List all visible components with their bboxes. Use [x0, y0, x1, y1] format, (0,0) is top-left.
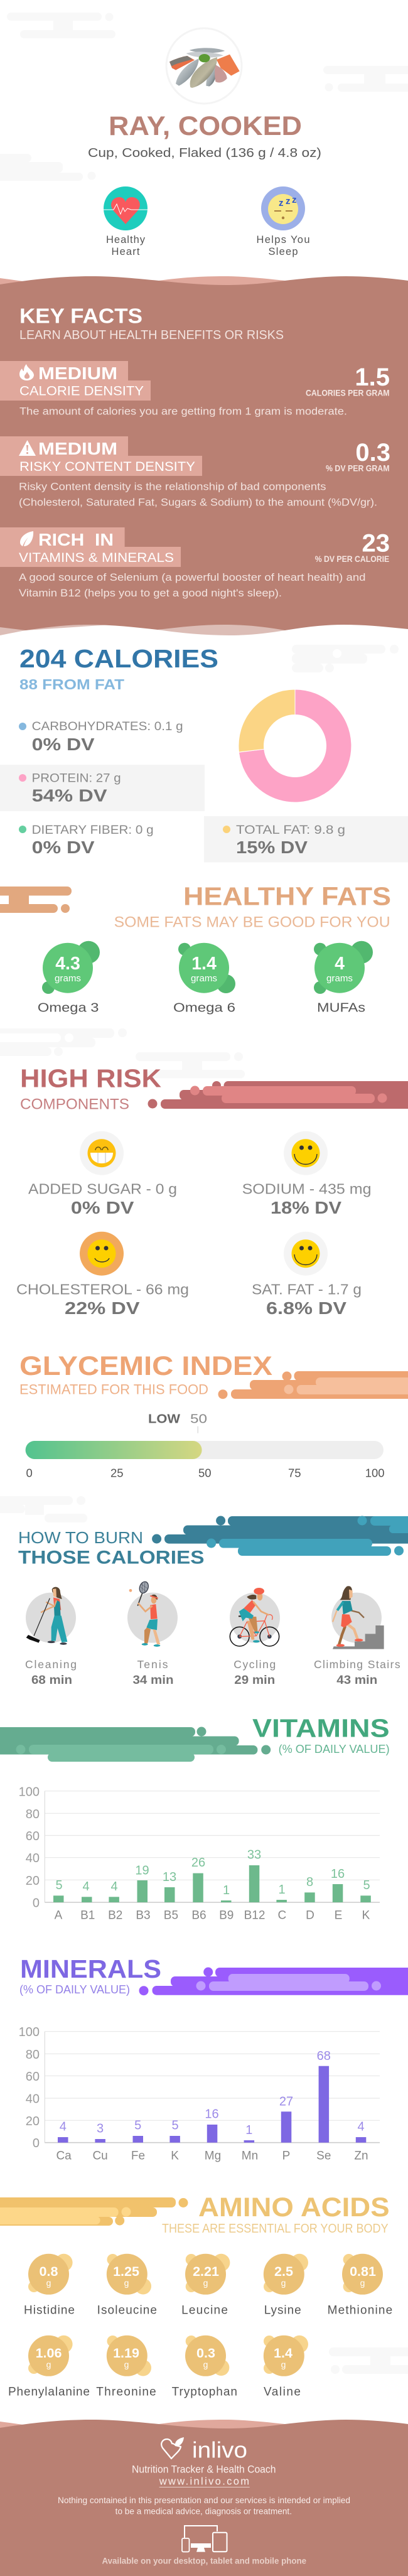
amino: threonine: g: [124, 2359, 129, 2369]
amino: valine: [264, 2336, 308, 2398]
scale labels: 25: [110, 1467, 124, 1480]
vitamins bar chart: 0: [33, 1896, 40, 1910]
benefit: healthy heart: Heart: [112, 246, 140, 257]
minerals bar chart: 4: [357, 2120, 365, 2133]
amino: histidine: [24, 2254, 75, 2317]
food image: assorted fish in a ring: [166, 28, 242, 104]
glycemic heading: GLYCEMIC INDEX: [19, 1351, 272, 1381]
fact: calorie density: MEDIUM: [38, 364, 117, 383]
vitamins bar chart: 4: [110, 1880, 118, 1894]
saturated fat: [252, 1232, 362, 1318]
amino acids panel: [0, 2192, 392, 2398]
value marker: 50: [190, 1413, 207, 1426]
fact: rich in vitamins and minerals: A good source of Selenium (a powerful booster of heart health) and: [19, 572, 365, 583]
minerals bar chart: K: [171, 2149, 179, 2162]
activity: cleaning: [25, 1587, 77, 1687]
disclaimer: Nothing contained in this presentation and our services is intended or implied: [58, 2496, 350, 2505]
glycemic subheading: ESTIMATED FOR THIS FOOD: [19, 1382, 208, 1398]
amino: methionine: [328, 2254, 392, 2317]
legend: dietary fiber: 0% DV: [32, 838, 95, 857]
minerals bar chart: 20: [26, 2115, 40, 2128]
amino: tryptophan: [172, 2336, 237, 2398]
amino: lysine: [264, 2254, 308, 2317]
amino: tryptophan: Tryptophan: [172, 2385, 237, 2398]
fact: risky content density: Risky Content density is the relationship of bad components: [19, 481, 326, 492]
amino: valine: Valine: [264, 2385, 301, 2398]
amino: phenylalanine: [8, 2336, 90, 2398]
amino: histidine: g: [46, 2278, 51, 2288]
minerals bar chart: 40: [26, 2092, 40, 2106]
amino: leucine: 2.21: [193, 2264, 219, 2279]
calories panel: [0, 644, 408, 863]
decorative clouds: header: [0, 13, 408, 181]
amino: leucine: g: [203, 2278, 208, 2288]
minerals bar chart: Zn: [354, 2149, 368, 2162]
cholesterol: CHOLESTEROL - 66 mg: [16, 1281, 189, 1298]
minerals heading: MINERALS: [20, 1954, 161, 1983]
banner decoration: [148, 1081, 408, 1109]
vitamins bar chart: 80: [26, 1808, 40, 1821]
vitamins bar chart: 100: [19, 1785, 40, 1799]
saturated fat: SAT. FAT - 1.7 g: [252, 1281, 362, 1298]
burn calories panel: [18, 1516, 408, 1687]
legend: dietary fiber: DIETARY FIBER: 0 g: [32, 823, 154, 837]
fact: rich in vitamins and minerals: VITAMINS & MINERALS: [19, 550, 174, 565]
vitamins bar chart: [19, 1785, 380, 1922]
omega 6: grams: [191, 974, 217, 984]
vitamins bar chart: 20: [26, 1874, 40, 1888]
legend: total fat: [204, 816, 408, 863]
minerals bar chart: Cu: [92, 2149, 108, 2162]
amino: methionine: Methionine: [328, 2304, 392, 2317]
benefit: healthy heart: Healthy: [106, 234, 146, 245]
value marker: LOW: [148, 1413, 180, 1426]
legend: dietary fiber: [19, 823, 154, 857]
banner decoration: [218, 1371, 408, 1399]
legend: protein: [0, 765, 205, 811]
amino: methionine: 0.81: [350, 2264, 376, 2279]
vitamins bar chart: D: [306, 1909, 314, 1922]
vitamins bar chart: 5: [55, 1878, 63, 1892]
omega 3: 4.3: [55, 954, 80, 974]
vitamins bar chart: K: [362, 1909, 370, 1922]
vitamins bar chart: B3: [136, 1909, 151, 1922]
amino: histidine: Histidine: [24, 2304, 75, 2317]
donut chart: [239, 689, 352, 802]
healthy fats panel: [0, 882, 391, 1015]
calories from fat: 88 FROM FAT: [19, 676, 124, 693]
decorative clouds: high risk: [0, 1028, 245, 1079]
amino: isoleucine: [97, 2254, 157, 2317]
minerals bar chart: Mn: [242, 2149, 258, 2162]
added sugar: ADDED SUGAR - 0 g: [28, 1181, 177, 1197]
legend: protein: 54% DV: [32, 786, 107, 806]
amino: threonine: Threonine: [96, 2385, 156, 2398]
vitamins bar chart: A: [55, 1909, 63, 1922]
benefit: helps you sleep: Helps You: [256, 234, 310, 245]
value marker: [148, 1413, 207, 1433]
minerals bar chart: 0: [33, 2137, 40, 2150]
amino: valine: 1.4: [274, 2346, 293, 2361]
high risk heading: HIGH RISK: [20, 1064, 161, 1093]
fact: risky content density: % DV PER GRAM: [326, 463, 389, 473]
amino: lysine: g: [281, 2278, 286, 2288]
scale labels: 50: [198, 1467, 212, 1480]
amino acids subheading: THESE ARE ESSENTIAL FOR YOUR BODY: [162, 2222, 389, 2236]
minerals bar chart: 60: [26, 2070, 40, 2084]
fact: calorie density: CALORIES PER GRAM: [306, 388, 389, 398]
minerals bar chart: Se: [316, 2149, 331, 2162]
activity: climbing stairs: 43 min: [336, 1673, 377, 1687]
footer panel: [0, 2420, 408, 2576]
omega 3: Omega 3: [38, 1001, 99, 1015]
disclaimer: [58, 2496, 350, 2516]
added sugar: [28, 1131, 177, 1217]
vitamins bar chart: 13: [163, 1870, 176, 1884]
healthy fats subheading: SOME FATS MAY BE GOOD FOR YOU: [114, 914, 390, 931]
fact: risky content density: [0, 436, 390, 508]
minerals bar chart: 5: [134, 2119, 141, 2133]
vitamins bar chart: 1: [223, 1883, 230, 1897]
sodium: [242, 1131, 372, 1217]
amino: threonine: [96, 2336, 156, 2398]
banner decoration: [0, 887, 72, 913]
amino: tryptophan: g: [203, 2359, 208, 2369]
MUFAs: [314, 941, 373, 1015]
sodium: SODIUM - 435 mg: [242, 1181, 372, 1197]
activity: cycling: [230, 1588, 280, 1687]
amino: phenylalanine: Phenylalanine: [8, 2385, 90, 2398]
MUFAs: MUFAs: [317, 1001, 365, 1015]
omega 3: grams: [55, 974, 81, 984]
vitamins bar chart: 16: [331, 1867, 345, 1881]
cholesterol: [16, 1232, 189, 1318]
vitamins bar chart: 40: [26, 1851, 40, 1865]
vitamins bar chart: C: [278, 1909, 286, 1922]
amino: leucine: [181, 2254, 230, 2317]
activity: cycling: 29 min: [234, 1673, 275, 1687]
activity: climbing stairs: Climbing Stairs: [314, 1658, 400, 1671]
minerals bar chart: 1: [245, 2123, 252, 2137]
fact: rich in vitamins and minerals: Vitamin B12 (helps you to get a good night's sleep).: [19, 588, 282, 599]
cholesterol: 22% DV: [65, 1298, 140, 1318]
saturated fat: 6.8% DV: [266, 1298, 347, 1318]
omega 6: Omega 6: [173, 1001, 235, 1015]
amino: valine: g: [281, 2359, 286, 2369]
glycemic index panel: [19, 1351, 408, 1480]
legend: total fat: 15% DV: [236, 838, 308, 857]
logo: [161, 2437, 247, 2463]
glycemic scale bar: [26, 1441, 384, 1459]
vitamins bar chart: B12: [244, 1909, 265, 1922]
icon: devices: [182, 2526, 227, 2552]
fact: risky content density: RISKY CONTENT DENSITY: [19, 459, 195, 474]
fact: calorie density: [0, 361, 390, 417]
activity: climbing stairs: [314, 1586, 400, 1687]
legend: carbohydrates: [19, 719, 183, 754]
logo: inlivo: [192, 2437, 247, 2463]
vitamins bar chart: 26: [191, 1856, 205, 1870]
fact: rich in vitamins and minerals: % DV PER CALORIE: [315, 554, 389, 564]
banner decoration: [0, 2197, 188, 2226]
fact: risky content density: (Cholesterol, Saturated Fat, Sugars & Sodium) to the amount (%DV/gr).: [19, 497, 377, 508]
banner decoration: [0, 1727, 271, 1762]
vitamins bar chart: 5: [363, 1878, 370, 1892]
fact: calorie density: 1.5: [355, 364, 390, 391]
tagline: Nutrition Tracker & Health Coach: [132, 2464, 276, 2475]
legend: total fat: TOTAL FAT: 9.8 g: [236, 823, 345, 837]
amino: threonine: 1.19: [113, 2346, 139, 2361]
high risk subheading: COMPONENTS: [20, 1096, 129, 1113]
vitamins bar chart: B1: [80, 1909, 95, 1922]
amino: tryptophan: 0.3: [196, 2346, 215, 2361]
scale labels: 100: [365, 1467, 385, 1480]
minerals bar chart: Mg: [205, 2149, 221, 2162]
calories heading: 204 CALORIES: [19, 644, 218, 673]
amino: leucine: Leucine: [181, 2304, 228, 2317]
omega 3: [38, 941, 100, 1015]
decorative cloud: amino: [329, 2347, 408, 2374]
amino: phenylalanine: g: [46, 2359, 51, 2369]
activity: cycling: Cycling: [234, 1658, 276, 1671]
sodium: 18% DV: [271, 1198, 342, 1217]
vitamins bar chart: E: [335, 1909, 342, 1922]
benefit: helps you sleep: [256, 186, 310, 257]
minerals bar chart: 5: [171, 2119, 179, 2133]
key facts heading: KEY FACTS: [19, 305, 142, 328]
serving size: Cup, Cooked, Flaked (136 g / 4.8 oz): [88, 146, 321, 160]
vitamins heading: VITAMINS: [252, 1714, 390, 1743]
minerals bar chart: [19, 2025, 380, 2162]
amino acids heading: AMINO ACIDS: [198, 2192, 390, 2223]
minerals bar chart: 16: [205, 2107, 219, 2121]
vitamins bar chart: B6: [191, 1909, 207, 1922]
amino: histidine: 0.8: [40, 2264, 58, 2279]
disclaimer: to be a medical advice, diagnosis or treatment.: [115, 2507, 292, 2516]
benefit: helps you sleep: z: [286, 196, 290, 207]
activity: cleaning: 68 min: [31, 1673, 72, 1687]
minerals panel: [19, 1954, 408, 2162]
amino: isoleucine: g: [124, 2278, 129, 2288]
minerals bar chart: 80: [26, 2048, 40, 2062]
fact: rich in vitamins and minerals: 23: [362, 529, 390, 557]
minerals bar chart: P: [282, 2149, 290, 2162]
omega 6: [173, 943, 235, 1015]
key facts subheading: LEARN ABOUT HEALTH BENEFITS OR RISKS: [19, 328, 284, 342]
fact: risky content density: 0.3: [355, 439, 390, 466]
vitamins bar chart: 60: [26, 1830, 40, 1843]
legend: protein: PROTEIN: 27 g: [32, 772, 121, 785]
scale labels: 75: [288, 1467, 301, 1480]
vitamins bar chart: 33: [247, 1848, 261, 1862]
high risk panel: [16, 1064, 408, 1318]
minerals bar chart: 4: [60, 2120, 67, 2133]
healthy fats heading: HEALTHY FATS: [183, 882, 391, 911]
fact: rich in vitamins and minerals: RICH IN: [38, 530, 114, 549]
fact: risky content density: MEDIUM: [38, 439, 117, 458]
vitamins bar chart: 1: [278, 1883, 286, 1897]
minerals bar chart: 68: [317, 2049, 331, 2063]
fact: calorie density: CALORIE DENSITY: [19, 383, 144, 398]
vitamins bar chart: 19: [135, 1863, 149, 1877]
activity: cleaning: Cleaning: [25, 1658, 77, 1671]
banner decoration: [152, 1516, 408, 1556]
benefit: helps you sleep: z: [279, 198, 284, 208]
benefit: healthy heart: [104, 186, 148, 257]
decorative cloud: calories: [292, 645, 399, 672]
amino: isoleucine: 1.25: [113, 2264, 139, 2279]
amino: phenylalanine: 1.06: [36, 2346, 62, 2361]
legend: carbohydrates: CARBOHYDRATES: 0.1 g: [32, 719, 183, 733]
vitamins bar chart: B9: [219, 1909, 234, 1922]
key facts panel: [0, 276, 408, 635]
scale labels: [26, 1467, 385, 1480]
availability note: Available on your desktop, tablet and mobile phone: [102, 2555, 306, 2565]
fact: calorie density: The amount of calories you are getting from 1 gram is moderate.: [19, 406, 347, 417]
activity: tennis: 34 min: [133, 1673, 173, 1687]
amino: lysine: Lysine: [264, 2304, 301, 2317]
benefit: helps you sleep: z: [292, 195, 296, 205]
vitamins bar chart: 8: [306, 1875, 313, 1889]
MUFAs: grams: [326, 974, 353, 984]
minerals bar chart: Fe: [131, 2149, 145, 2162]
burn heading line 2: THOSE CALORIES: [18, 1548, 205, 1568]
vitamins subheading: (% OF DAILY VALUE): [279, 1742, 390, 1755]
vitamins bar chart: B2: [108, 1909, 122, 1922]
vitamins panel: [0, 1714, 390, 1922]
omega 6: 1.4: [191, 954, 217, 974]
MUFAs: 4: [335, 954, 345, 974]
banner decoration: [139, 1968, 408, 1995]
activity: tennis: [127, 1580, 178, 1687]
title: RAY, COOKED: [109, 111, 302, 141]
website: www.inlivo.com: [159, 2476, 249, 2487]
amino: methionine: g: [360, 2278, 365, 2288]
minerals subheading: (% OF DAILY VALUE): [19, 1983, 130, 1996]
burn heading line 1: HOW TO BURN: [18, 1528, 143, 1547]
fact: rich in vitamins and minerals: [0, 527, 390, 599]
vitamins bar chart: 4: [82, 1880, 90, 1894]
minerals bar chart: 27: [279, 2094, 293, 2108]
minerals bar chart: 3: [97, 2122, 104, 2136]
minerals bar chart: 100: [19, 2025, 40, 2039]
amino: lysine: 2.5: [274, 2264, 293, 2279]
activity: tennis: Tenis: [137, 1658, 168, 1671]
added sugar: 0% DV: [71, 1198, 134, 1217]
vitamins bar chart: B5: [164, 1909, 178, 1922]
minerals bar chart: Ca: [56, 2149, 72, 2162]
scale labels: 0: [26, 1467, 33, 1480]
legend: carbohydrates: 0% DV: [32, 735, 95, 754]
decorative cloud: burn: [0, 1496, 87, 1522]
amino: isoleucine: Isoleucine: [97, 2304, 157, 2317]
benefit: helps you sleep: Sleep: [269, 246, 298, 257]
